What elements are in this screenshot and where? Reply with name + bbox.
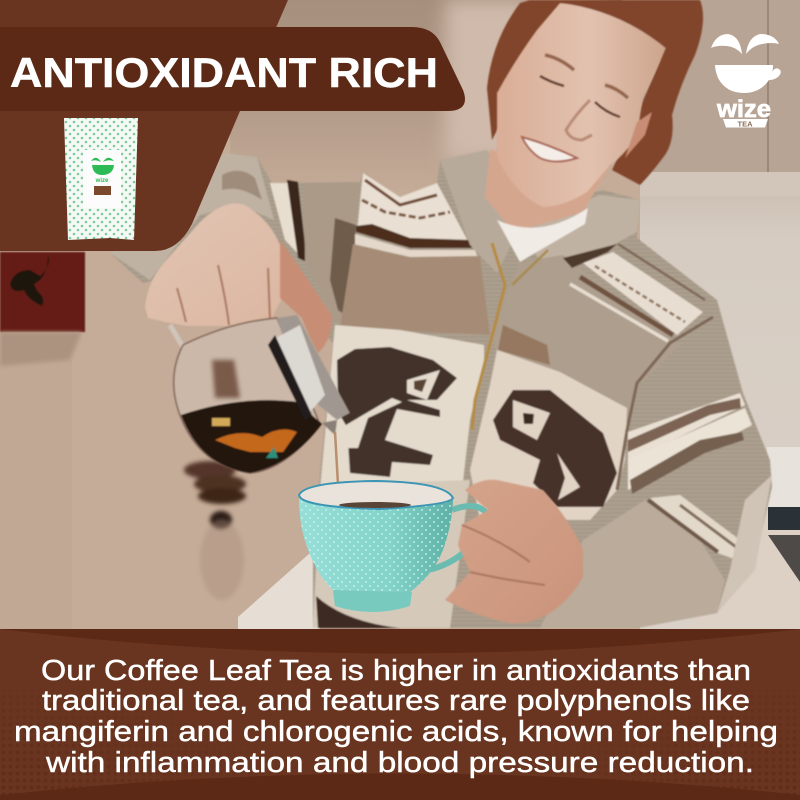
kitchen background bbox=[0, 0, 800, 630]
logo tea word: TEA bbox=[738, 120, 753, 128]
elbow cream edge bbox=[717, 475, 772, 613]
body text: Our Coffee Leaf Tea is higher in antioxidants than bbox=[41, 655, 751, 687]
logo wordmark: wize bbox=[716, 96, 771, 123]
right whale bbox=[493, 390, 617, 507]
sleeve cream band bbox=[270, 183, 306, 262]
chest dark stripe bbox=[356, 224, 472, 248]
top left panel background bbox=[0, 0, 288, 251]
bag logo word: wize bbox=[95, 178, 109, 184]
pinecone decoration bbox=[184, 461, 246, 600]
brand logo bbox=[711, 34, 781, 128]
art shadow bbox=[0, 332, 82, 366]
teapot handle stub bbox=[170, 325, 183, 347]
reflection bbox=[212, 360, 240, 398]
logo tea tag bbox=[723, 119, 768, 128]
nose bbox=[566, 100, 592, 140]
collar bbox=[440, 150, 516, 273]
teapot lid bbox=[277, 315, 350, 420]
glass teapot bbox=[170, 315, 350, 473]
body text bbox=[14, 655, 778, 779]
right sleeve stripes bbox=[628, 393, 745, 462]
closed eyes bbox=[540, 76, 564, 86]
thumb bbox=[280, 240, 332, 353]
forearm cuff band bbox=[650, 495, 740, 560]
body text: traditional tea, and features rare polyphenols like bbox=[42, 685, 750, 717]
right chest brown shade bbox=[498, 325, 550, 365]
ear bbox=[625, 112, 652, 158]
right chest tan bbox=[490, 255, 680, 420]
yoke right dark lines bbox=[580, 277, 673, 335]
pouring hand bbox=[145, 203, 332, 353]
upper arm bbox=[304, 182, 360, 330]
smile bbox=[522, 137, 577, 162]
forearm bbox=[540, 500, 725, 628]
body text: mangiferin and chlorogenic acids, known for helping bbox=[14, 716, 778, 748]
finger gaps bbox=[177, 265, 270, 325]
eyebrows bbox=[545, 55, 574, 70]
left whale bbox=[337, 347, 457, 477]
cup rim bbox=[299, 481, 453, 509]
right whale fin bbox=[557, 453, 580, 500]
lower chest bbox=[313, 480, 470, 628]
halftone dots left bbox=[2, 758, 75, 794]
photo: man pouring tea bbox=[0, 0, 800, 630]
left whale eye bbox=[407, 370, 440, 400]
wall art bbox=[0, 252, 85, 332]
body text: with inflammation and blood pressure reduction. bbox=[45, 747, 754, 779]
holding hand bbox=[445, 480, 583, 623]
tea stream bbox=[335, 432, 339, 502]
sweater bbox=[110, 150, 772, 628]
logo leaves bbox=[711, 34, 742, 54]
right whale eye bbox=[513, 400, 550, 440]
logo cup bbox=[715, 65, 781, 93]
title banner bbox=[0, 27, 465, 111]
hair bbox=[487, 0, 703, 185]
neck and t-shirt bbox=[485, 150, 610, 262]
halftone dots right bbox=[730, 759, 800, 795]
zipper bbox=[472, 243, 505, 430]
bottom dark curve bbox=[0, 774, 800, 800]
cup handle bbox=[428, 506, 488, 570]
chest tan band bbox=[340, 244, 490, 335]
glass body bbox=[174, 318, 320, 473]
product bag bbox=[64, 118, 138, 240]
bottom panel bbox=[0, 629, 800, 800]
cup foot bbox=[333, 590, 412, 612]
bag label bbox=[83, 150, 121, 208]
cup bowl bbox=[299, 498, 453, 592]
teacup bbox=[299, 481, 488, 612]
left whale jaw bbox=[346, 398, 402, 448]
bag label band bbox=[94, 186, 111, 195]
hem stripe bbox=[316, 596, 400, 628]
sweater body and sleeves bbox=[110, 150, 772, 628]
hair fringe bbox=[560, 0, 680, 50]
upper arm shadow bbox=[330, 218, 356, 320]
cuff dark band bbox=[222, 171, 262, 200]
chest cream thin stripe bbox=[355, 234, 478, 258]
tea orange glow bbox=[215, 429, 297, 452]
right chest cream bbox=[470, 350, 627, 520]
face bbox=[497, 0, 680, 207]
yoke zigzag bbox=[365, 180, 437, 205]
top dark curve bbox=[0, 629, 800, 654]
tea and leaves bbox=[181, 400, 322, 473]
chest cream band bbox=[320, 325, 484, 490]
bag logo bbox=[91, 158, 114, 175]
tea in cup bbox=[339, 502, 411, 508]
sleeve dark band bbox=[287, 180, 307, 262]
chest yoke cream bbox=[357, 173, 470, 245]
sleeve cuff bbox=[110, 153, 274, 280]
title: ANTIOXIDANT RICH bbox=[10, 49, 438, 96]
yoke right cream bbox=[583, 252, 703, 335]
sleeve seam bbox=[617, 317, 713, 490]
